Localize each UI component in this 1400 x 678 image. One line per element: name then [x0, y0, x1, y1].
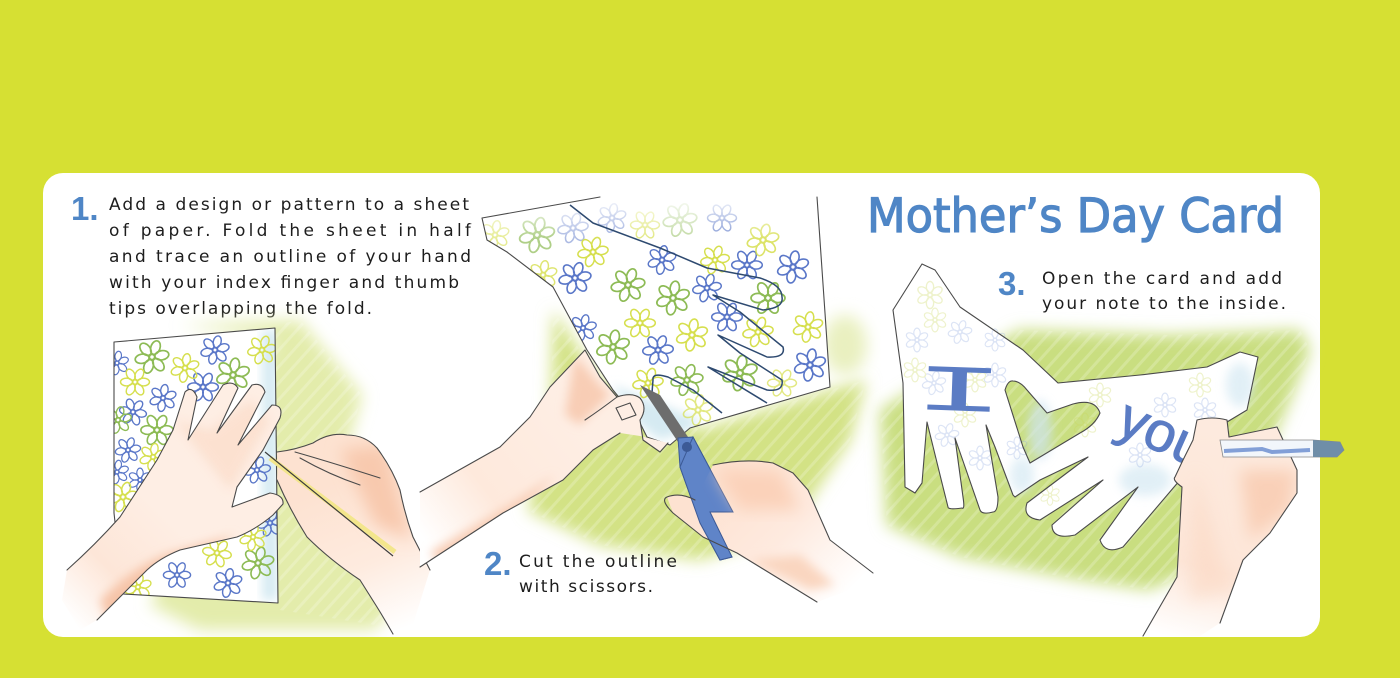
handwritten word you: you: [1109, 385, 1217, 480]
step 2 instructions: 2.: [484, 545, 512, 582]
step 1 instructions: [71, 190, 472, 319]
step 2 illustration: cutting with scissors: [420, 194, 873, 602]
handwritten word I: I: [911, 354, 1007, 432]
green crayon scribble behind paper: [150, 320, 398, 630]
pen: [1220, 440, 1344, 457]
left hand pressing paper: [62, 383, 283, 630]
right hand holding pencil: [265, 434, 430, 634]
step 1 instructions: tips overlapping the fold.: [109, 299, 372, 319]
pencil: [265, 452, 395, 556]
step 2 instructions: with scissors.: [519, 577, 653, 597]
left hand holding paper: [420, 350, 668, 567]
scissors: [640, 385, 733, 560]
pale blue wash: [1010, 363, 1254, 496]
paper sheet with flowers: [113, 328, 279, 604]
step 3 illustration: open card with note: [880, 264, 1344, 636]
step 2 instructions: [484, 545, 677, 597]
green crayon scribble: [880, 330, 1310, 590]
title: Mother’s Day Card: [867, 189, 1284, 244]
step 1 instructions: Add a design or pattern to a sheet: [109, 195, 469, 215]
step 1 instructions: 1.: [71, 190, 99, 227]
step 3 instructions: 3.: [998, 265, 1026, 302]
traced hand outline: [570, 205, 783, 413]
panel: white card: [43, 173, 1320, 637]
hand-shaped card: [893, 264, 1258, 550]
step 3 instructions: [998, 265, 1286, 314]
patterned paper with hand outline: [470, 194, 830, 445]
step 1 instructions: of paper. Fold the sheet in half: [109, 221, 472, 241]
step 2 instructions: Cut the outline: [519, 552, 677, 572]
hand writing with pen: [1143, 418, 1344, 636]
step 1 instructions: with your index finger and thumb: [109, 273, 459, 293]
faint flowers: [903, 281, 1217, 505]
step 3 instructions: Open the card and add: [1042, 269, 1282, 289]
step 3 instructions: your note to the inside.: [1042, 294, 1286, 314]
green crayon scribble: [527, 310, 867, 560]
right hand on scissors: [665, 437, 873, 602]
step 1 instructions: and trace an outline of your hand: [109, 247, 471, 267]
step 1 illustration: hands tracing on patterned paper: [62, 320, 430, 634]
